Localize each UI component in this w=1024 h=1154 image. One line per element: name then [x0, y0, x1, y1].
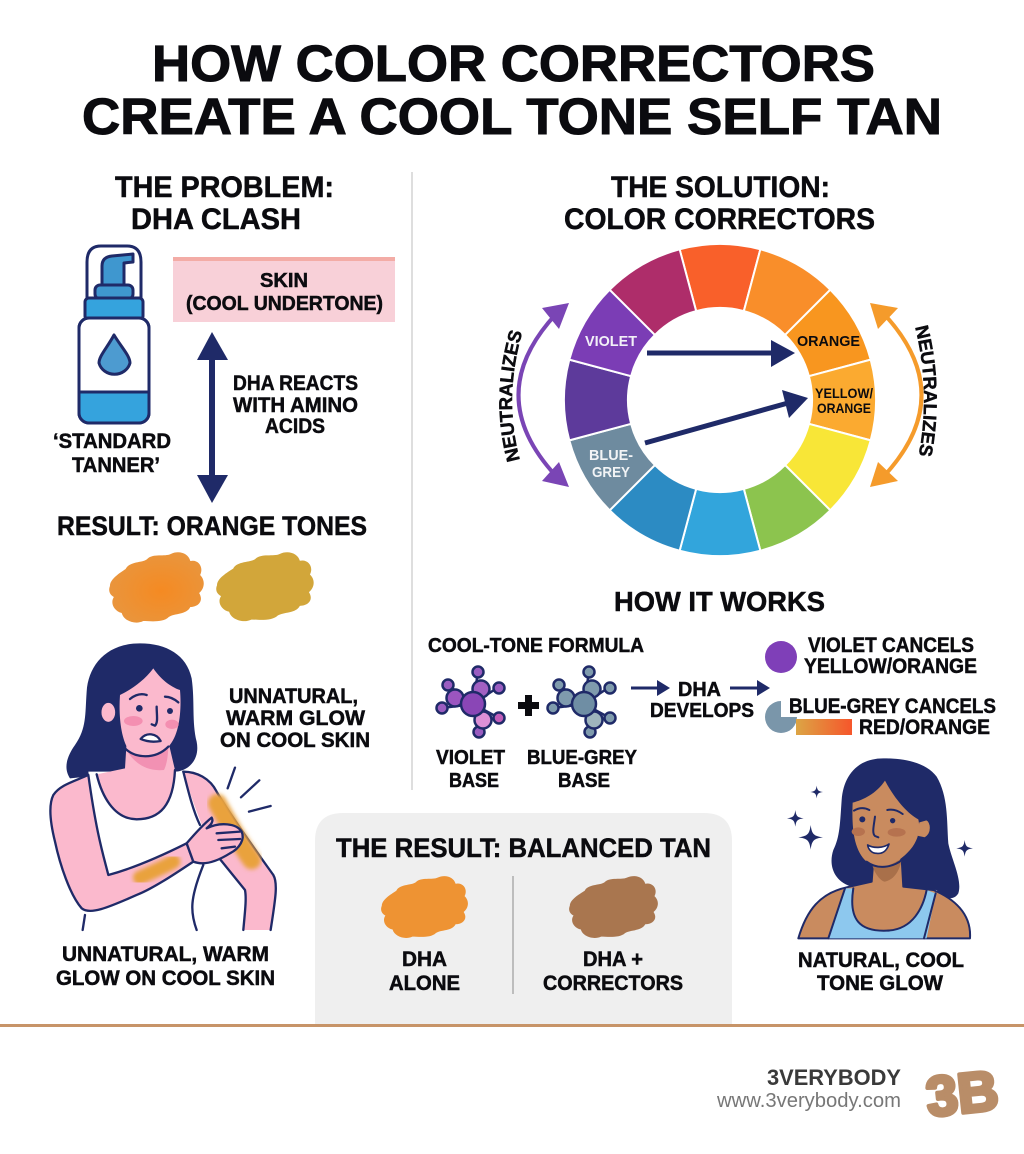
label: violet cancels: YELLOW/ORANGE — [804, 655, 977, 678]
label: dha alone: ALONE — [389, 972, 460, 995]
label: dha plus correctors: DHA + — [583, 948, 643, 971]
swatches: orange tones — [109, 552, 314, 623]
label: dha reacts: ACIDS — [265, 415, 325, 438]
label: dha develops — [650, 679, 754, 722]
icon: violet circle — [765, 641, 797, 673]
swatch: dha alone — [381, 876, 468, 938]
heading: the solution: THE SOLUTION: — [611, 171, 830, 204]
panel: skin cool undertone: SKIN — [260, 270, 308, 292]
label: violet cancels: VIOLET CANCELS — [808, 634, 974, 657]
label: dha develops: DHA — [678, 679, 721, 701]
label: cool-tone formula: COOL-TONE FORMULA — [428, 635, 644, 657]
brand name: 3VERYBODY — [767, 1065, 901, 1090]
chart: color wheel — [564, 244, 876, 556]
label: standard tanner — [53, 430, 171, 477]
label: dha develops: DEVELOPS — [650, 700, 754, 722]
label: unnatural warm glow bottom: UNNATURAL, WARM — [62, 943, 269, 966]
label: neutralizes right: NEUTRALIZES — [915, 325, 938, 456]
label: dha reacts — [233, 372, 358, 438]
arrow: violet to orange — [647, 340, 795, 367]
icon: plus — [518, 695, 539, 716]
icon: violet molecule — [436, 666, 504, 738]
label: unnatural warm glow top: ON COOL SKIN — [220, 729, 370, 752]
chart: color wheel: YELLOW/ — [815, 385, 873, 401]
heading: result orange tones: RESULT: ORANGE TONES — [57, 511, 367, 541]
label: blue-grey base: BLUE-GREY — [527, 747, 638, 769]
title: CREATE A COOL TONE SELF TAN — [82, 88, 942, 145]
label: unnatural warm glow top: WARM GLOW — [226, 707, 365, 730]
panel: skin cool undertone — [173, 257, 395, 322]
arrow: to dha develops — [631, 680, 670, 696]
heading: the problem: DHA CLASH — [131, 203, 301, 236]
illustration: worried woman with orange patches — [50, 643, 276, 930]
icon: standard tanner bottle — [79, 246, 149, 423]
label: blue-grey cancels: RED/ORANGE — [859, 716, 990, 739]
label: unnatural warm glow top — [220, 685, 370, 752]
arrow: violet neutralizes — [518, 303, 569, 487]
label: natural cool tone glow: TONE GLOW — [817, 972, 943, 995]
swatch: dha plus correctors — [569, 876, 658, 938]
icon: blue-grey pie — [765, 701, 797, 733]
heading: the problem: THE PROBLEM: — [115, 171, 334, 204]
arrow: orange neutralizes — [870, 303, 922, 487]
title — [82, 35, 942, 145]
label: natural cool tone glow: NATURAL, COOL — [798, 949, 964, 972]
label: dha plus correctors — [543, 948, 683, 995]
icon: gradient bar — [796, 719, 852, 735]
label: violet base: VIOLET — [436, 747, 505, 769]
label: standard tanner: TANNER’ — [72, 454, 160, 477]
label: dha alone: DHA — [402, 948, 447, 971]
label: dha reacts: DHA REACTS — [233, 372, 358, 395]
label: violet base — [436, 747, 505, 792]
label: dha plus correctors: CORRECTORS — [543, 972, 683, 995]
panel: the result balanced tan — [315, 813, 732, 1024]
heading: the solution — [564, 171, 875, 236]
heading: how it works: HOW IT WORKS — [614, 586, 825, 617]
chart: color wheel: BLUE- — [589, 447, 633, 464]
label: unnatural warm glow bottom — [56, 943, 275, 990]
chart: color wheel: ORANGE — [797, 333, 860, 350]
label: dha alone — [389, 948, 460, 995]
label: unnatural warm glow bottom: GLOW ON COOL SKIN — [56, 967, 275, 990]
chart: color wheel: GREY — [592, 464, 630, 481]
arrow: from dha develops — [730, 680, 770, 696]
chart: color wheel: VIOLET — [585, 333, 637, 350]
label: violet base: BASE — [449, 770, 499, 792]
chart: color wheel: ORANGE — [817, 400, 871, 416]
brand name — [716, 1065, 901, 1112]
illustration: happy woman with natural tan — [787, 758, 973, 938]
arrow: blue-grey to yellow orange — [645, 390, 808, 443]
title: HOW COLOR CORRECTORS — [152, 35, 875, 92]
label: blue-grey base: BASE — [558, 770, 610, 792]
label: blue-grey base — [527, 747, 638, 792]
label: neutralizes left: NEUTRALIZES — [499, 330, 522, 462]
heading: the problem — [115, 171, 334, 236]
arrow: double headed reaction — [197, 332, 228, 503]
heading: the result: THE RESULT: BALANCED TAN — [336, 833, 711, 863]
panel: skin cool undertone: (COOL UNDERTONE) — [186, 293, 383, 315]
label: blue-grey cancels: BLUE-GREY CANCELS — [789, 695, 996, 718]
label: natural cool tone glow — [798, 949, 964, 995]
label: unnatural warm glow top: UNNATURAL, — [229, 685, 358, 708]
label: standard tanner: ‘STANDARD — [53, 430, 171, 453]
label: dha reacts: WITH AMINO — [233, 394, 358, 417]
label: violet cancels — [804, 634, 977, 678]
icon: blue-grey molecule — [548, 666, 616, 738]
heading: the solution: COLOR CORRECTORS — [564, 203, 875, 236]
label: blue-grey cancels — [789, 695, 996, 739]
brand name: www.3verybody.com — [716, 1090, 901, 1112]
logo: 3B: 3B — [923, 1058, 1001, 1128]
